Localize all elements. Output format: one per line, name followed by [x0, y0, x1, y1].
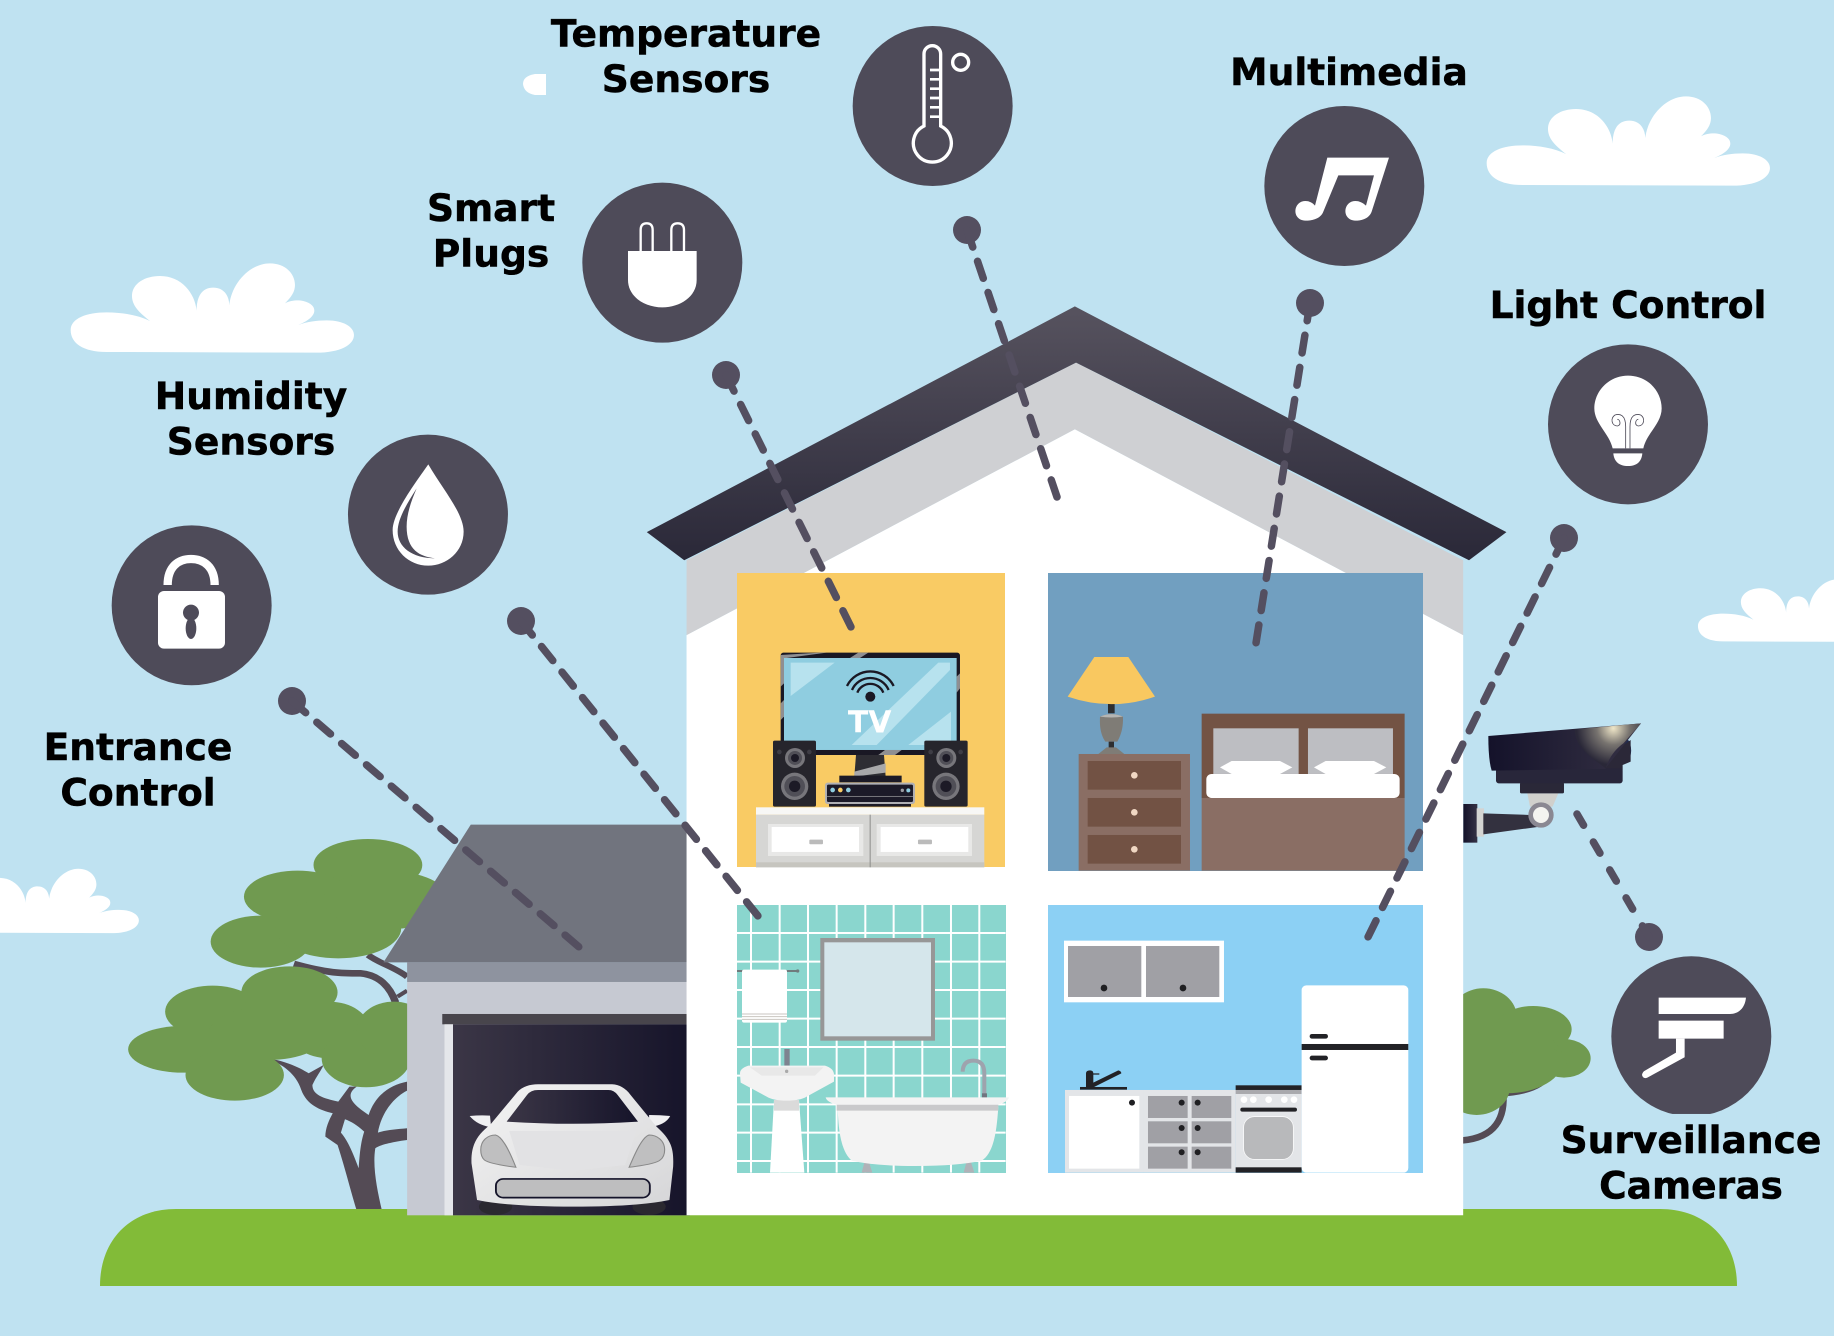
- dashed connector: surveillance cameras: [1577, 814, 1663, 951]
- cloud fragment behind heading: [523, 74, 546, 95]
- label: surveillance cameras: Cameras: [1599, 1164, 1783, 1208]
- mirror: [820, 938, 935, 1041]
- living room wall: [737, 573, 1005, 867]
- wall cabinets: [1064, 941, 1224, 1002]
- car: [470, 1084, 673, 1215]
- icon: water drop: [348, 435, 508, 595]
- tv cabinet: [756, 807, 984, 867]
- cloud: right edge: [1698, 579, 1834, 642]
- label: smart plugs: Plugs: [433, 232, 549, 276]
- garage: [383, 825, 690, 1215]
- house walls: [687, 429, 1463, 1215]
- cloud: left edge: [0, 869, 139, 933]
- kitchen: [1048, 905, 1423, 1173]
- garage roof: [383, 825, 690, 962]
- bathtub: [826, 1061, 1009, 1173]
- label: temperature sensors: Temperature: [551, 12, 821, 56]
- oven: [1236, 1085, 1302, 1173]
- cloud: upper right: [1487, 96, 1770, 186]
- security camera on wall: [1463, 723, 1641, 843]
- icon: thermometer: [853, 26, 1013, 186]
- tree behind house, right: [1443, 988, 1591, 1141]
- tree behind garage: [128, 839, 449, 1211]
- receiver: [825, 783, 915, 807]
- label: temperature sensors: Sensors: [602, 57, 770, 101]
- label: humidity sensors: Humidity: [155, 374, 347, 418]
- dashed connector: temperature sensors: [953, 216, 1057, 497]
- tiled wall: [737, 905, 1006, 1173]
- roof inner band: [687, 363, 1463, 635]
- label: surveillance cameras: Surveillance: [1561, 1118, 1821, 1162]
- dashed connector: smart plugs: [712, 361, 851, 627]
- dashed connector: entrance control: [278, 687, 579, 947]
- right speaker: [924, 741, 968, 807]
- garage wall: [407, 962, 690, 1215]
- television: TV: [848, 706, 892, 741]
- label: light control: Light Control: [1490, 283, 1766, 327]
- house: [647, 306, 1506, 1215]
- label: entrance control: Entrance: [44, 725, 232, 769]
- bed: [1202, 714, 1405, 871]
- drawers: [1144, 1090, 1236, 1173]
- table lamp: [1068, 657, 1155, 754]
- icon: surveillance camera: [1607, 956, 1777, 1121]
- label: multimedia: Multimedia: [1230, 50, 1468, 94]
- bedroom wall: [1048, 573, 1423, 871]
- dashed connector: light control: [1368, 524, 1578, 937]
- bathroom: [737, 905, 1009, 1173]
- television: [781, 653, 960, 782]
- sink: [740, 1049, 834, 1173]
- canopy: [128, 839, 449, 1101]
- cloud: upper left: [71, 263, 354, 353]
- bedroom: [1048, 573, 1423, 871]
- trunk and branches: [268, 955, 407, 1211]
- ground: [100, 1209, 1737, 1286]
- label: entrance control: Control: [60, 771, 216, 815]
- label: smart plugs: Smart: [427, 186, 555, 230]
- kitchen wall: [1048, 905, 1423, 1173]
- icon: plug: [582, 183, 742, 343]
- sink unit: [1065, 1070, 1144, 1173]
- icon: music notes: [1264, 106, 1424, 266]
- icon: padlock: [112, 525, 272, 685]
- fridge: [1302, 985, 1408, 1173]
- living room: [737, 573, 1005, 867]
- nightstand: [1079, 754, 1190, 871]
- roof: [647, 306, 1506, 560]
- icon: light bulb: [1548, 344, 1708, 504]
- left speaker: [773, 741, 816, 807]
- label: humidity sensors: Sensors: [167, 420, 335, 464]
- dashed connector: multimedia: [1256, 289, 1324, 643]
- towel: [737, 969, 799, 1023]
- dashed connector: humidity sensors: [507, 607, 758, 916]
